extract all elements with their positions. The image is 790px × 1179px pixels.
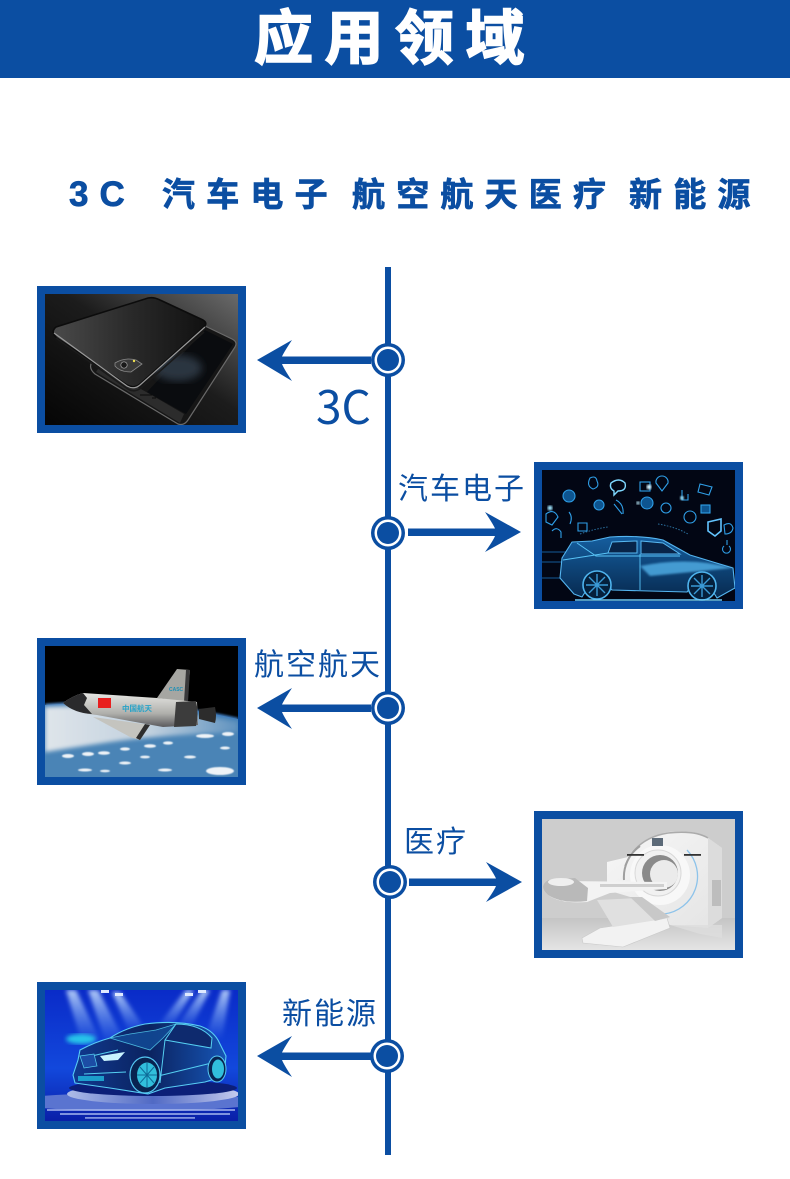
photo frame: CT scanner	[534, 811, 743, 958]
label: 航空航天	[254, 640, 382, 684]
photo frame: phones	[37, 286, 246, 433]
arrow right	[408, 512, 521, 552]
arrow right	[409, 862, 522, 902]
label: 新能源	[282, 989, 378, 1033]
arrow left	[257, 340, 371, 381]
label 3C: 3C	[316, 372, 371, 438]
node	[373, 865, 407, 899]
header band	[0, 0, 790, 78]
photo frame: space plane	[37, 638, 246, 785]
photo frame: space plane: 中国航天	[122, 703, 152, 714]
timeline axis	[385, 267, 391, 1155]
arrow left	[257, 688, 371, 729]
subtitle: application list: 汽车电子	[162, 176, 339, 213]
node	[370, 1039, 404, 1073]
subtitle: application list: 航空航天医疗	[352, 176, 617, 213]
label: 汽车电子	[398, 464, 526, 508]
photo frame: connected car	[534, 462, 743, 609]
branch: automotive electronics	[371, 462, 743, 609]
arrow left	[257, 1036, 371, 1077]
node	[371, 343, 405, 377]
branch: medical	[373, 811, 743, 958]
node	[371, 691, 405, 725]
subtitle: application list: 3C	[69, 175, 136, 214]
branch: aerospace	[37, 638, 405, 785]
title: 应用领域	[254, 6, 536, 72]
photo frame: EV on stage	[10, 982, 260, 1129]
subtitle: application list: 新能源	[629, 176, 762, 213]
branch: 3C	[37, 286, 405, 438]
branch: new energy	[10, 982, 404, 1129]
node	[371, 516, 405, 550]
photo frame: space plane: CASC	[169, 687, 184, 693]
label: 医疗	[404, 817, 468, 861]
subtitle: application list	[69, 175, 762, 214]
